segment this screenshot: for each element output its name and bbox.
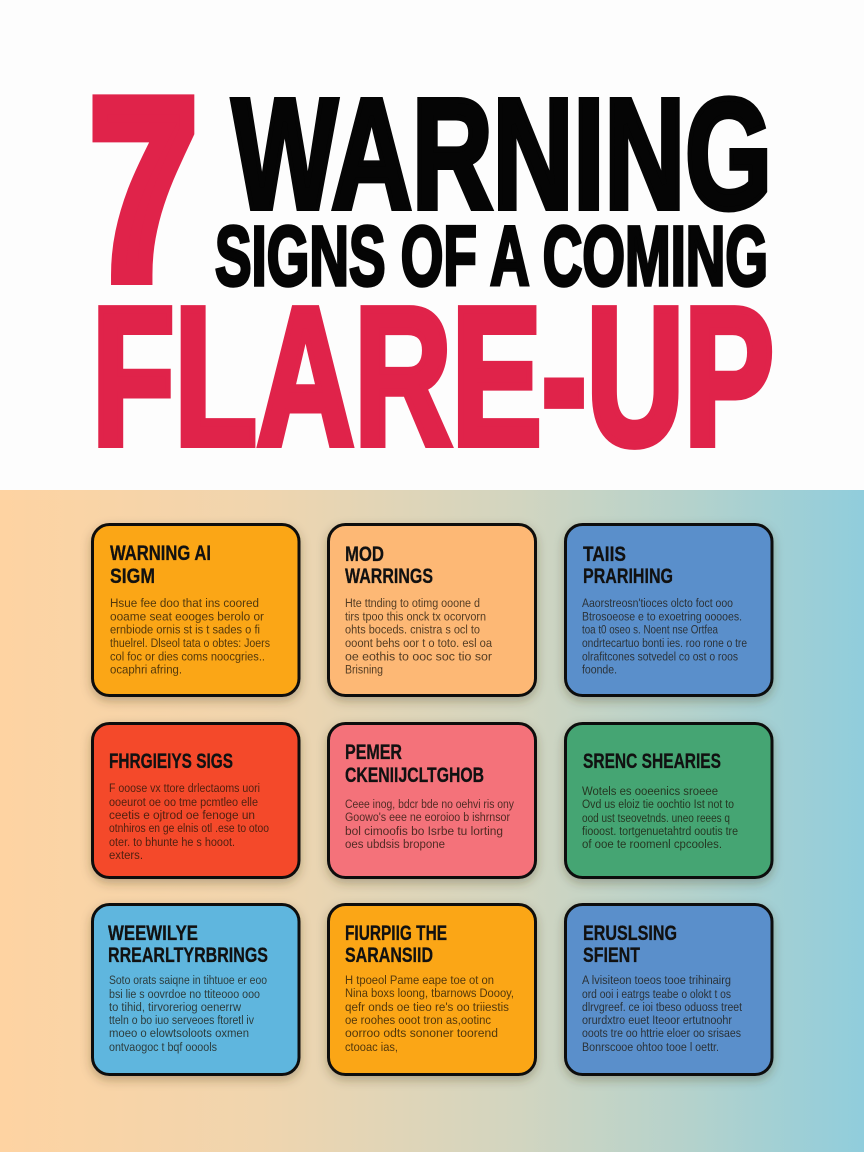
card 9 body text: orurdxtro euet Iteoor ertutnoohr [582, 1013, 732, 1027]
card 5 heading: CKENIIJCLTGHOB [345, 764, 484, 787]
card 5 heading: PEMER [345, 741, 402, 764]
card 2 heading: WARRINGS [345, 565, 433, 588]
card 5 body text: Ceee inog, bdcr bde no oehvi ris ony [345, 797, 515, 811]
card 9 body text [582, 973, 743, 1054]
card 3 heading: PRARIHING [583, 565, 673, 588]
card 6 heading: SRENC SHEARIES [583, 750, 721, 773]
card 3 heading [583, 543, 673, 588]
card 3 body text: foonde. [582, 663, 617, 677]
panel: card 2 peach [328, 524, 536, 696]
card 7 body text: Soto orats saiqne in tihtuoe er eoo [109, 973, 267, 987]
card 8 heading: FIURPIIG THE [345, 922, 447, 945]
card 7 heading: RREARLTYRBRINGS [108, 944, 268, 967]
card 5 heading [345, 741, 484, 787]
card 7 heading: WEEWILYE [108, 922, 198, 945]
card 8 body text: H tpoeol Pame eape toe ot on [345, 973, 494, 987]
card 8 body text [345, 973, 514, 1054]
card 3 body text: ondrtecartuo bonti ies. roo rone o tre [582, 636, 747, 650]
card 6 body text: of ooe te roomenl cpcooles. [582, 837, 722, 851]
card 1 body text: col foc or dies coms noocgries.. [110, 649, 265, 663]
card 3 body text: Aaorstreosn'tioces olcto foct ooo [582, 596, 733, 610]
card 5 body text: oes ubdsis bropone [345, 837, 445, 851]
card 2 heading [345, 543, 433, 588]
card 2 body text: Brisning [345, 663, 383, 677]
card 6 body text: fiooost. tortgenuetahtrd ooutis tre [582, 824, 738, 838]
card 8 body text: ctooac ias, [345, 1040, 398, 1054]
card 8 body text: Nina boxs loong, tbarnows Doooy, [345, 986, 514, 1000]
card 2 body text: Hte ttnding to otimg ooone d [345, 596, 480, 610]
card 3 body text: toa t0 oseo s. Noent nse Ortfea [582, 623, 718, 637]
card 8 body text: qefr onds oe tieo re's oo triiestis [345, 1000, 509, 1014]
card 7 body text: tteln o bo iuo serveoes ftoretl iv [109, 1013, 255, 1027]
card 7 body text: moeo o elowtsoloots oxmen [109, 1026, 249, 1040]
gradient lower background [0, 490, 864, 1152]
card 8 heading [345, 922, 447, 967]
card 2 body text: ooont behs oor t o toto. esl oa [345, 636, 492, 650]
title: numeral 7: 7 [92, 50, 195, 328]
panel: card 5 pink [328, 724, 536, 878]
card 4 body text [109, 781, 269, 862]
card 9 body text: A lvisiteon toeos tooe trihinairg [582, 973, 731, 987]
card 8 heading: SARANSIID [345, 944, 433, 967]
header background [0, 0, 864, 490]
card 1 body text: ernbiode ornis st is t sades o fi [110, 623, 260, 637]
card 5 body text [345, 797, 515, 851]
panel: card 1 orange [92, 524, 299, 696]
card 2 body text: tirs tpoo this onck tx ocorvorn [345, 609, 486, 623]
card 4 body text: otnhiros en ge elnis otl .ese to otoo [109, 821, 269, 835]
card 2 body text: ohts boceds. cnistra s ocl to [345, 623, 480, 637]
card 1 body text [110, 596, 270, 677]
card 5 body text: bol cimoofis bo Isrbe tu lorting [345, 824, 503, 838]
card 3 body text: Btrosoeose e to exoetring ooooes. [582, 609, 742, 623]
card 8 body text: oe roohes ooot tron as,ootinc [345, 1013, 491, 1027]
card 3 body text: olrafitcones sotvedel co ost o roos [582, 649, 738, 663]
panel: card 4 red [92, 724, 299, 878]
card 3 heading: TAIIS [583, 543, 626, 566]
card 4 body text: F ooose vx ttore drlectaoms uori [109, 781, 260, 795]
card 9 body text: ooots tre oo httrie eloer oo srisaes [582, 1026, 741, 1040]
card 7 body text: ontvaogoc t bqf ooools [109, 1040, 217, 1054]
card 1 body text: Hsue fee doo that ins coored [110, 596, 259, 610]
card 7 body text: bsi lie s oovrdoe no ttiteooo ooo [109, 987, 260, 1001]
card 9 heading: SFIENT [583, 944, 640, 967]
card 7 body text [109, 973, 267, 1054]
card 1 heading [110, 542, 211, 588]
panel: card 6 green [566, 724, 772, 878]
card 1 body text: thuelrel. Dlseol tata o obtes: Joers [110, 636, 270, 650]
card 4 body text: exters. [109, 848, 143, 862]
card 9 heading [583, 922, 677, 967]
panel: card 8 orange [328, 904, 536, 1074]
card 9 body text: Bonrscooe ohtoo tooe l oettr. [582, 1040, 719, 1054]
card 4 body text: ceetis e ojtrod oe fenoge un [109, 808, 255, 822]
card 8 body text: oorroo odts sononer toorend [345, 1026, 498, 1040]
card 9 body text: ord ooi i eatrgs teabe o olokt t os [582, 987, 731, 1001]
card 7 body text: to tihid, tirvoreriog oenerrw [109, 1000, 241, 1014]
card 2 body text [345, 596, 492, 677]
card 2 heading: MOD [345, 543, 384, 566]
panel: card 9 blue [566, 904, 772, 1074]
card 1 body text: ocaphri afring. [110, 663, 182, 677]
card 6 body text: Wotels es ooeenics sroeee [582, 784, 718, 798]
panel: card 7 sky blue [92, 904, 299, 1074]
card 3 body text [582, 596, 747, 677]
card 9 body text: dlrvgreef. ce ioi tbeso oduoss treet [582, 1000, 743, 1014]
card 5 body text: Goowo's eee ne eoroioo b ishrnsor [345, 810, 510, 824]
card 2 body text: oe eothis to ooc soc tio sor [345, 649, 492, 663]
card 1 heading: SIGM [110, 565, 155, 588]
card 4 body text: ooeurot oe oo tme pcmtleo elle [109, 795, 258, 809]
panel: card 3 blue [566, 524, 772, 696]
card 7 heading [108, 922, 268, 967]
card 4 heading: FHRGIEIYS SIGS [109, 750, 233, 773]
card 1 body text: ooame seat eooges berolo or [110, 609, 264, 623]
title [92, 50, 774, 486]
card 4 body text: oter. to bhunte he s hooot. [109, 835, 235, 849]
card 6 body text: Ovd us eloiz tie oochtio Ist not to [582, 797, 734, 811]
card 6 body text: ood ust tseovetnds. uneo reees q [582, 811, 730, 825]
card 1 heading: WARNING AI [110, 542, 211, 565]
card 9 heading: ERUSLSING [583, 922, 677, 945]
card 6 body text [582, 784, 738, 851]
